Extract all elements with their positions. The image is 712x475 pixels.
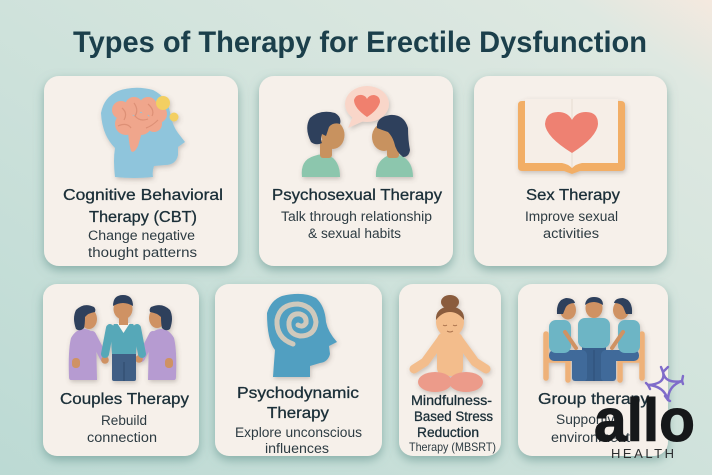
- panel: psychodynamic therapy: [215, 284, 382, 456]
- icon: purple star: [646, 367, 683, 401]
- panel: sex therapy: [474, 76, 667, 266]
- heading: Group therapy: [538, 391, 649, 408]
- wordmark subtitle: HEALTH: [611, 446, 674, 461]
- description: [87, 413, 157, 445]
- wordmark: allo: [594, 387, 695, 454]
- card background: [215, 284, 382, 456]
- icon: meditating person: [414, 295, 486, 392]
- description: [235, 425, 362, 456]
- icon: two people talking with heart bubble: [302, 86, 413, 177]
- heading: Couples Therapy: [60, 391, 189, 408]
- description: thought patterns: [88, 245, 197, 260]
- card background: [399, 284, 501, 456]
- heading: [237, 385, 359, 422]
- description: [551, 412, 630, 445]
- heading: [411, 393, 493, 440]
- description: Explore unconscious: [235, 425, 362, 440]
- heading: Psychosexual Therapy: [272, 187, 442, 204]
- description: activities: [543, 226, 599, 241]
- heading: Cognitive Behavioral: [63, 187, 223, 204]
- icon: three people on chairs: [546, 297, 642, 381]
- heading: Therapy (CBT): [89, 209, 197, 226]
- heading: Mindfulness-: [411, 393, 492, 408]
- description: environment: [551, 430, 630, 445]
- title: Types of Therapy for Erectile Dysfunction: [73, 26, 647, 59]
- card background: [474, 76, 667, 266]
- card background: [43, 284, 199, 456]
- icon: head with spiral: [267, 294, 337, 377]
- description: [525, 209, 618, 241]
- heading: Therapy: [267, 405, 329, 422]
- heading: Psychodynamic: [237, 385, 359, 402]
- description: Rebuild: [101, 413, 147, 428]
- icon: open book with heart: [518, 99, 625, 174]
- description: Supportive: [556, 412, 622, 427]
- panel: cognitive behavioral therapy: [44, 76, 238, 266]
- panel: group therapy: [518, 284, 668, 456]
- description: influences: [265, 441, 329, 456]
- icon: three people holding hands: [69, 295, 176, 381]
- description: & sexual habits: [308, 226, 401, 241]
- description: Talk through relationship: [281, 209, 432, 224]
- description: Therapy (MBSRT): [409, 440, 496, 454]
- panel: psychosexual therapy: [259, 76, 453, 266]
- heading: Based Stress: [414, 409, 493, 424]
- heading: Reduction: [417, 425, 479, 440]
- panel: couples therapy: [43, 284, 199, 456]
- card background: [259, 76, 453, 266]
- card background: [518, 284, 668, 456]
- icon: head with brain: [101, 88, 185, 178]
- panel: mindfulness-based stress reduction: [399, 284, 501, 456]
- description: [88, 228, 197, 260]
- description: connection: [87, 430, 157, 445]
- description: Change negative: [88, 228, 195, 243]
- description: Improve sexual: [525, 209, 618, 224]
- logo: allo health: [594, 367, 695, 461]
- card background: [44, 76, 238, 266]
- heading: Sex Therapy: [526, 187, 620, 204]
- description: [281, 209, 432, 241]
- heading: [63, 187, 223, 226]
